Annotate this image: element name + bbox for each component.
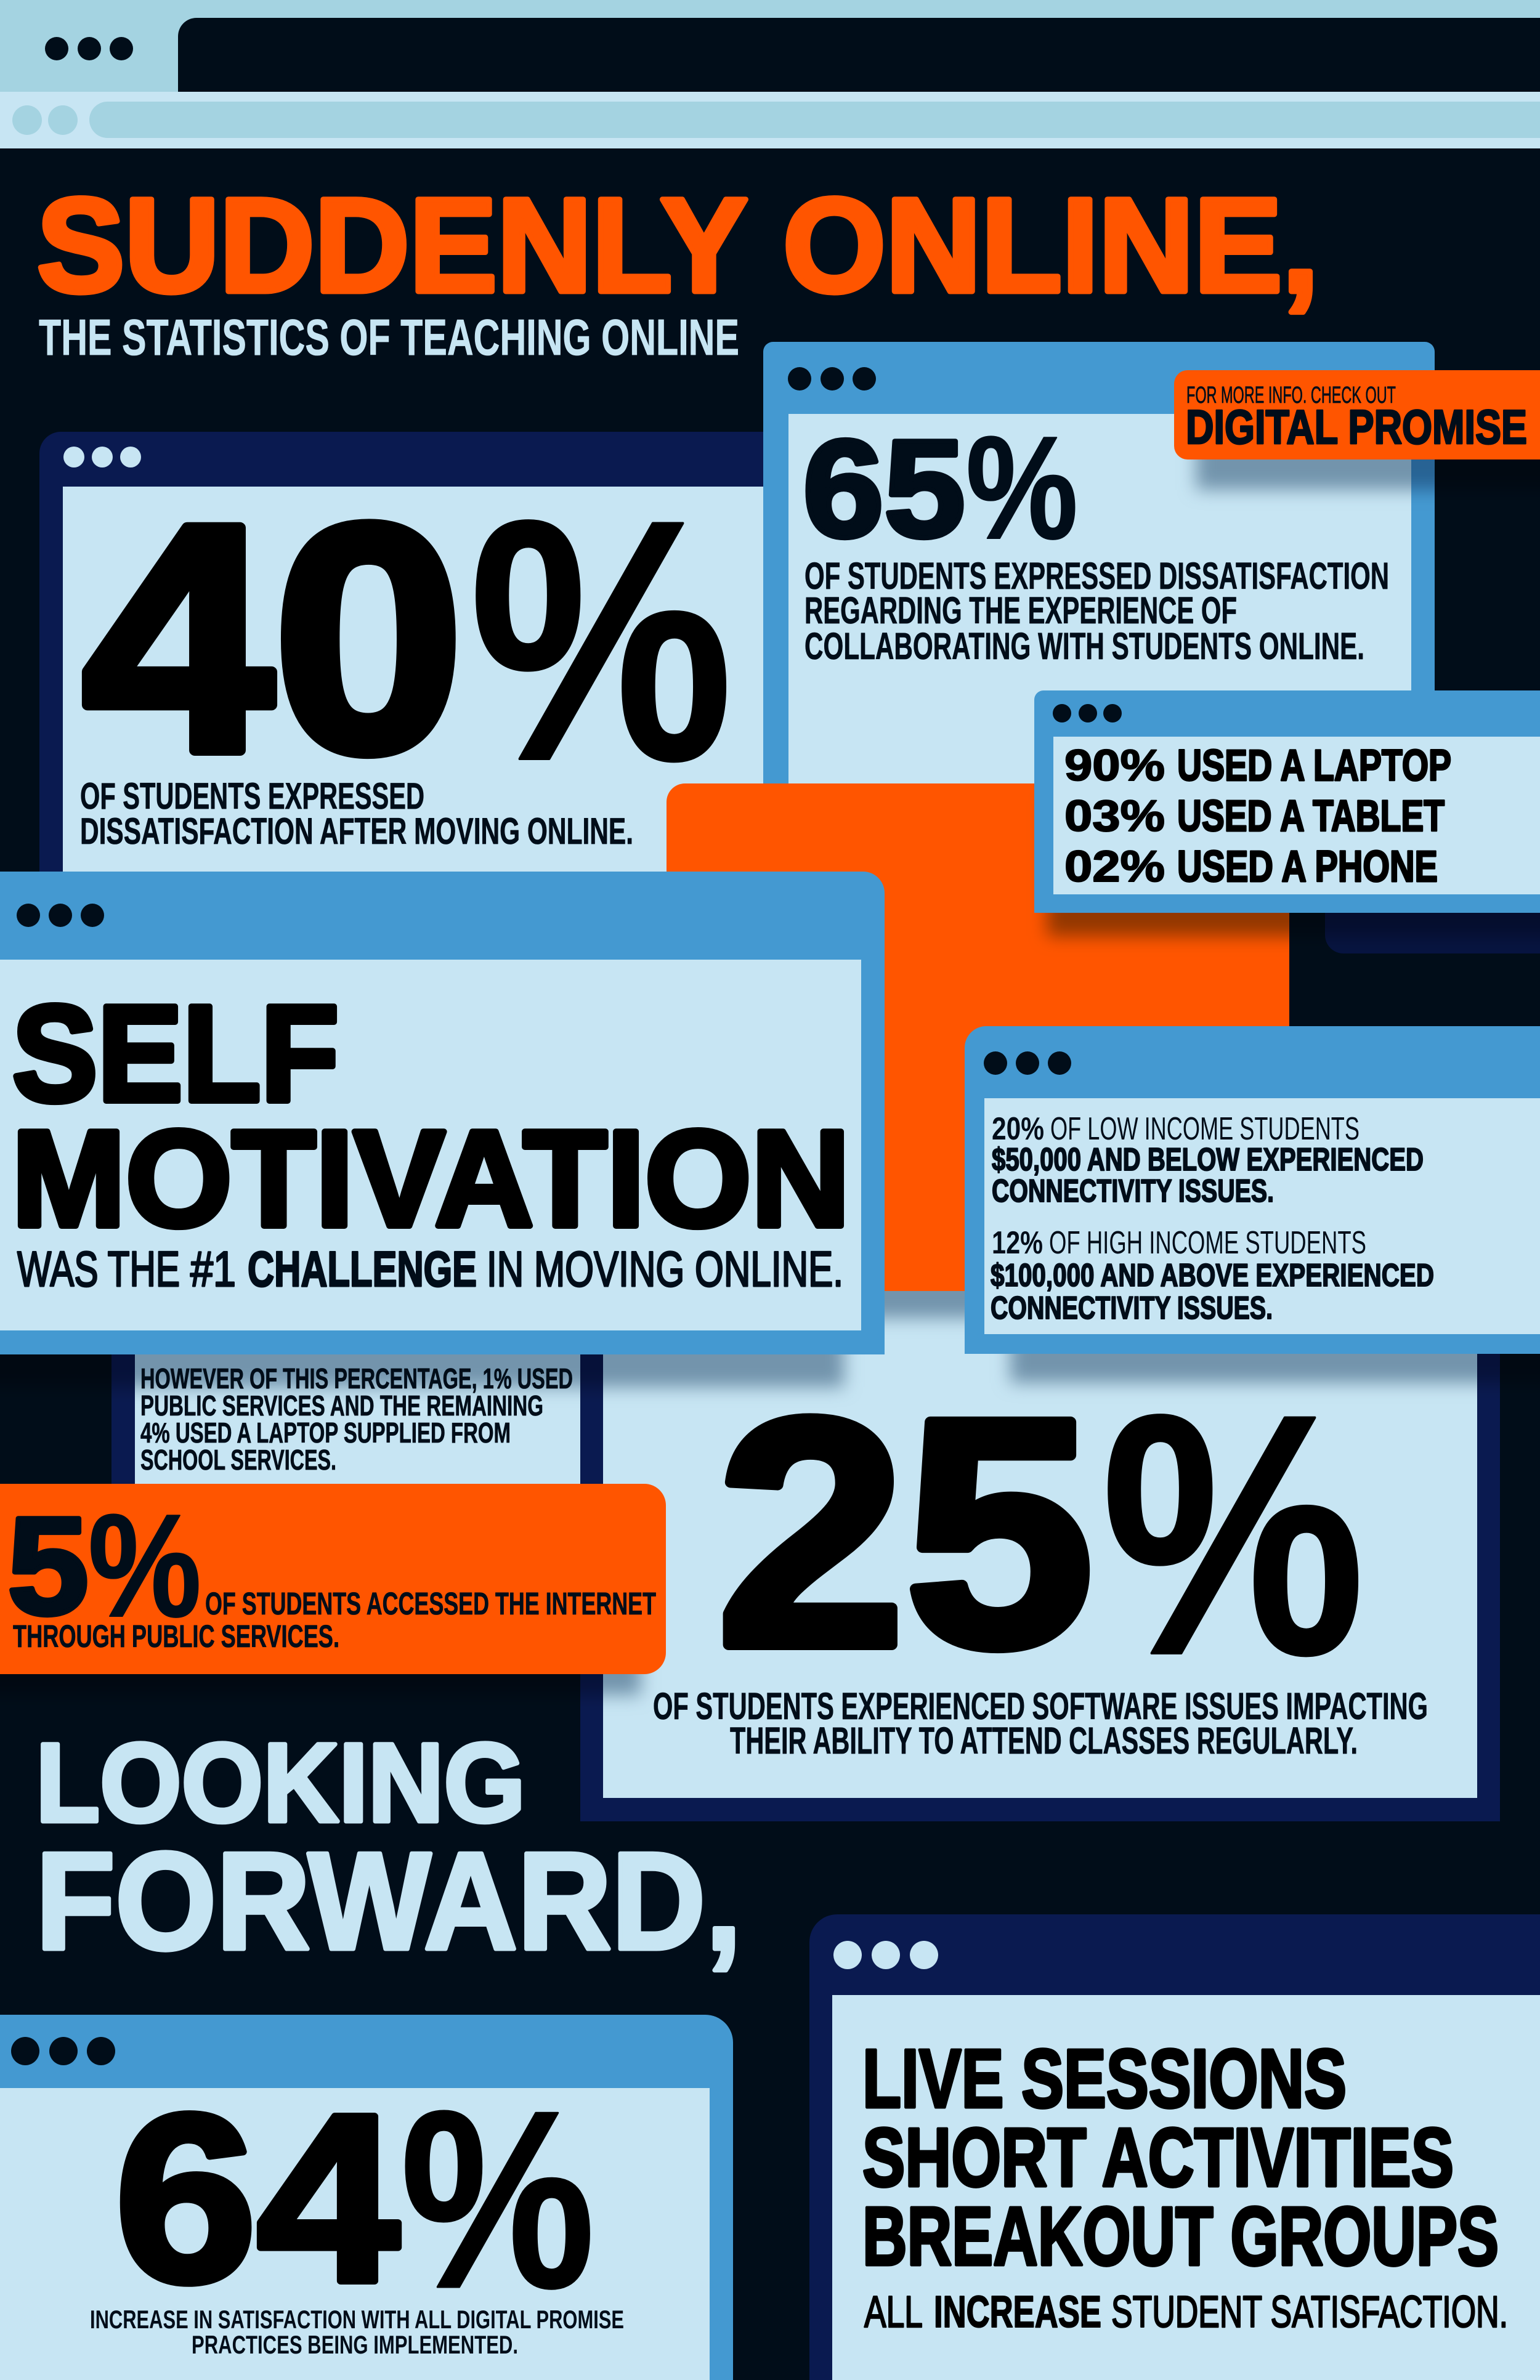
stat: 65%: [803, 407, 1078, 570]
panel: devices used: [1034, 690, 1540, 913]
heading: looking forward: LOOKING: [36, 1720, 525, 1845]
panel: however note: [111, 1293, 592, 1540]
callout: digital promise: FOR MORE INFO. CHECK OUT: [1186, 382, 1396, 408]
text: number one challenge: CHALLENGE: [248, 1242, 477, 1297]
panel: 5 percent: [0, 1484, 666, 1674]
list: laptop tablet phone: [1064, 742, 1451, 891]
panel: 40 percent: [39, 432, 840, 925]
text: high income: CONNECTIVITY ISSUES.: [991, 1290, 1273, 1326]
text: 5 percent caption: THROUGH PUBLIC SERVICES.: [13, 1619, 339, 1654]
text: 64 percent caption: INCREASE IN SATISFACTION WITH ALL DIGITAL PROMISE: [90, 2305, 624, 2334]
stat: 64%: [115, 2058, 595, 2341]
text: number one challenge: WAS THE: [17, 1242, 180, 1297]
list: laptop tablet phone: USED A TABLET: [1177, 792, 1445, 841]
stat: 65%: 65: [803, 411, 965, 566]
text: 40 percent caption: DISSATISFACTION AFTER MOVING ONLINE.: [80, 811, 633, 852]
text: however note: HOWEVER OF THIS PERCENTAGE, 1% USED: [140, 1362, 573, 1394]
text: increase satisfaction: ALL: [864, 2288, 923, 2337]
stat: 64%: %: [400, 2058, 595, 2341]
text: 64 percent caption: PRACTICES BEING IMPLEMENTED.: [192, 2330, 518, 2359]
list: laptop tablet phone: 03%: [1064, 792, 1165, 841]
text: low income: [992, 1111, 1424, 1209]
text: increase satisfaction: INCREASE: [934, 2288, 1101, 2337]
heading: self motivation: [12, 977, 850, 1255]
text: 5 percent caption: OF STUDENTS ACCESSED THE INTERNET: [205, 1586, 656, 1621]
text: 65 percent caption: [804, 555, 1389, 667]
stat: 25%: %: [1101, 1343, 1365, 1726]
callout: digital promise: [1174, 370, 1540, 459]
text: 5 percent caption: [13, 1586, 656, 1654]
list: laptop tablet phone: 90%: [1064, 742, 1165, 790]
title: [37, 171, 1319, 320]
text: low income: 20%: [992, 1111, 1044, 1147]
text: increase satisfaction: [864, 2288, 1508, 2337]
text: 64 percent caption: [90, 2305, 624, 2359]
panel: 25 percent: [111, 1232, 1500, 1821]
text: however note: [140, 1362, 573, 1476]
heading: self motivation: MOTIVATION: [12, 1103, 850, 1255]
panel: self motivation: [0, 872, 885, 1354]
text: however note: SCHOOL SERVICES.: [140, 1444, 336, 1476]
orange backdrop panel: [667, 783, 1289, 1291]
stat: 25%: 25: [717, 1353, 1093, 1714]
text: however note: PUBLIC SERVICES AND THE REMAINING: [140, 1390, 543, 1422]
text: number one challenge: IN MOVING ONLINE.: [487, 1242, 843, 1297]
heading: practices list: LIVE SESSIONS: [862, 2032, 1347, 2125]
text: number one challenge: #1: [190, 1242, 236, 1297]
text: 40 percent caption: OF STUDENTS EXPRESSED: [80, 775, 424, 817]
text: low income: $50,000 AND BELOW EXPERIENCED: [992, 1142, 1424, 1178]
subtitle: THE STATISTICS OF TEACHING ONLINE: [39, 309, 739, 366]
list: laptop tablet phone: USED A LAPTOP: [1177, 742, 1451, 790]
stat: 5%: 5: [7, 1488, 89, 1643]
panel: 64 percent: [0, 2015, 733, 2380]
panel: 65 percent: [763, 342, 1435, 801]
text: 25 percent caption: [653, 1685, 1428, 1762]
stat: 25%: [717, 1343, 1365, 1726]
stat: 5%: [7, 1484, 201, 1648]
browser top bar: [0, 0, 1540, 148]
list: laptop tablet phone: USED A PHONE: [1177, 843, 1438, 891]
panel: connectivity by income: [965, 1026, 1540, 1354]
text: 65 percent caption: REGARDING THE EXPERIENCE OF: [804, 589, 1237, 631]
stat: 40%: 40: [83, 458, 464, 819]
list: laptop tablet phone: 02%: [1064, 843, 1165, 891]
title: ONLINE,: [783, 171, 1319, 320]
heading: looking forward: [36, 1720, 742, 1978]
text: however note: 4% USED A LAPTOP SUPPLIED FROM: [140, 1417, 511, 1449]
stat: 64%: 64: [115, 2065, 401, 2332]
title: SUDDENLY: [37, 171, 748, 320]
text: 40 percent caption: [80, 775, 633, 852]
heading: self motivation: SELF: [12, 977, 339, 1130]
heading: practices list: [862, 2032, 1499, 2283]
text: high income: OF HIGH INCOME STUDENTS: [1049, 1225, 1366, 1261]
text: low income: OF LOW INCOME STUDENTS: [1050, 1111, 1360, 1147]
text: high income: 12%: [992, 1225, 1043, 1261]
navy window behind device panel: [1325, 801, 1540, 953]
stat: 40%: %: [469, 449, 733, 832]
stat: 65%: %: [966, 407, 1078, 570]
stat: 40%: [83, 449, 733, 832]
text: number one challenge: [17, 1242, 843, 1297]
text: low income: CONNECTIVITY ISSUES.: [992, 1173, 1274, 1209]
text: high income: [991, 1225, 1434, 1326]
panel: live sessions: [809, 1914, 1540, 2380]
stat: 5%: %: [88, 1484, 201, 1648]
heading: looking forward: FORWARD,: [36, 1823, 742, 1978]
